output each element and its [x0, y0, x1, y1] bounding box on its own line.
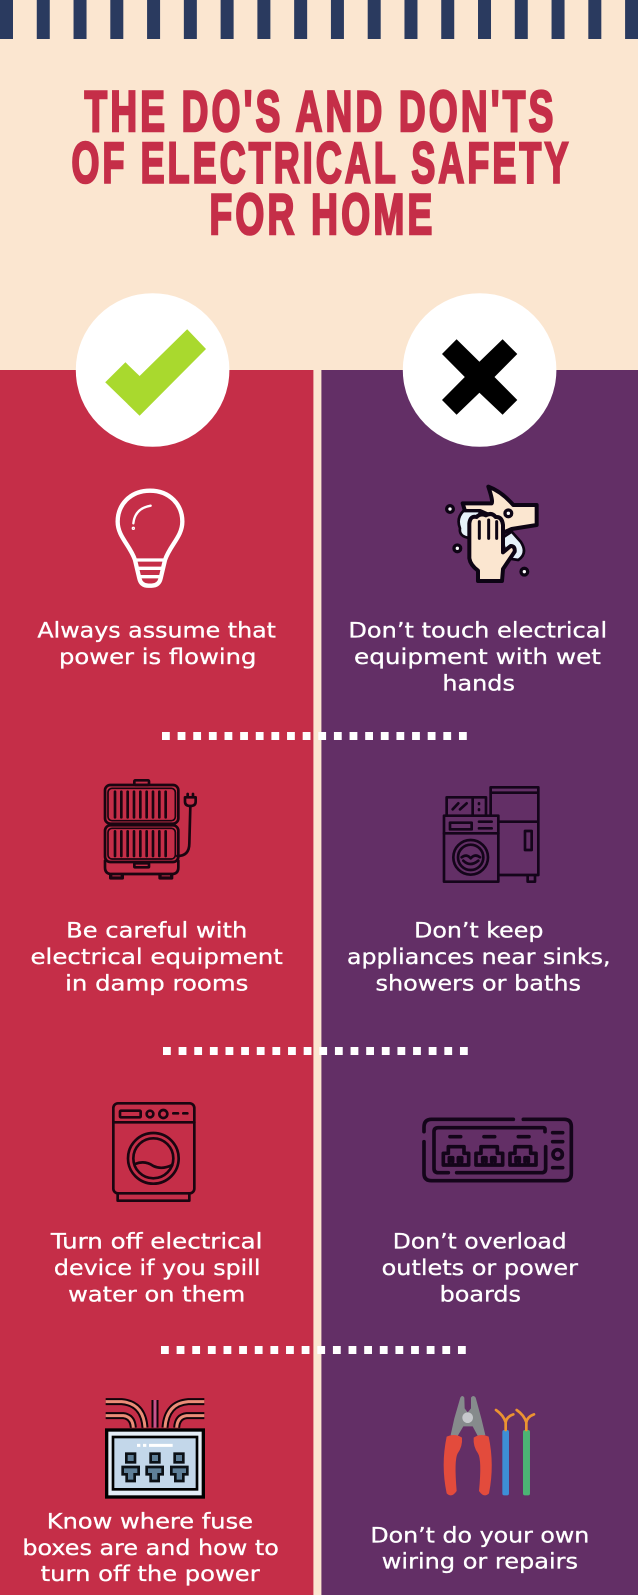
title: FOR HOME	[210, 183, 436, 247]
text: damp rooms	[30, 918, 283, 996]
icon: cross mark badge	[403, 293, 556, 447]
text: appliances: Don’t keep	[414, 918, 543, 942]
panel: don'ts column	[321, 370, 638, 1595]
text: own wiring	[370, 1523, 589, 1573]
text: fuse boxes	[22, 1509, 279, 1586]
text: wet hands	[348, 618, 607, 696]
text: fuse boxes: Know where fuse	[47, 1509, 253, 1533]
text: overload: Don’t overload	[393, 1230, 567, 1254]
icon: power board	[424, 1119, 571, 1181]
icon: washer and fridge	[444, 787, 538, 882]
text: spill water: device if you spill	[54, 1256, 261, 1280]
icon: fuse box	[106, 1400, 204, 1497]
text: damp rooms: in damp rooms	[65, 972, 248, 996]
icon: washing machine	[113, 1103, 194, 1201]
text: spill water: Turn off electrical	[50, 1230, 263, 1254]
top stripe band	[0, 0, 638, 39]
text: overload	[382, 1230, 578, 1306]
text: own wiring: Don’t do your own	[370, 1523, 589, 1547]
text: appliances: showers or baths	[376, 972, 581, 996]
icon: washing wet hands	[447, 487, 537, 581]
icon: sandwich grill	[105, 780, 196, 878]
text: appliances: appliances near sinks,	[347, 945, 610, 969]
icon: check mark badge	[76, 293, 229, 447]
text: fuse boxes: boxes are and how to	[22, 1536, 279, 1560]
text: damp rooms: electrical equipment	[30, 945, 283, 969]
text: always assume: Always assume that	[37, 618, 276, 642]
text: wet hands: Don’t touch electrical	[348, 618, 607, 642]
text: always assume	[37, 618, 276, 669]
text: fuse boxes: turn off the power	[41, 1562, 260, 1586]
text: spill water	[50, 1230, 263, 1306]
title	[72, 80, 572, 247]
text: wet hands: hands	[442, 672, 515, 696]
text: spill water: water on them	[68, 1282, 245, 1306]
panel: do's column	[0, 370, 313, 1595]
text: overload: outlets or power	[382, 1256, 578, 1280]
text: overload: boards	[440, 1282, 521, 1306]
text: own wiring: wiring or repairs	[382, 1549, 578, 1573]
icon: pliers and wires	[444, 1396, 534, 1495]
text: appliances	[347, 918, 610, 996]
text: always assume: power is flowing	[59, 645, 256, 669]
icon: light bulb	[118, 491, 182, 586]
text: damp rooms: Be careful with	[66, 918, 247, 942]
text: wet hands: equipment with wet	[354, 645, 601, 669]
